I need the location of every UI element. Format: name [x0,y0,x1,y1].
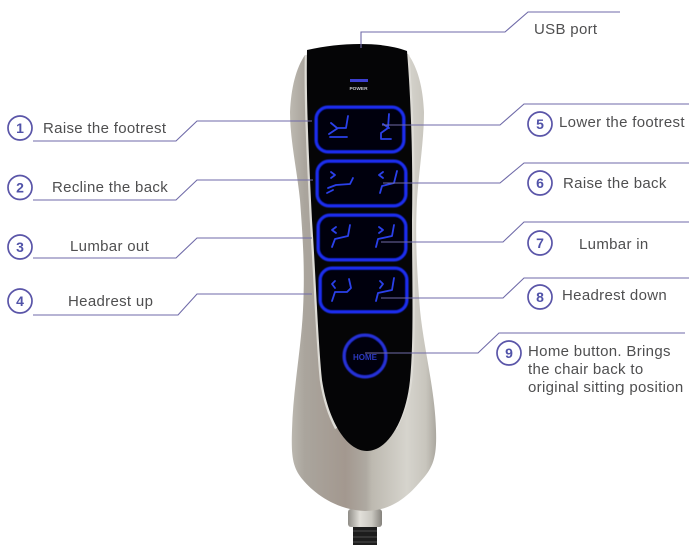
remote control [290,44,436,545]
callout 4: 4 [16,293,24,309]
metal collar [348,509,382,527]
button pair 1 [316,107,404,152]
callout 9: the chair back to [528,361,644,378]
silver body [290,54,436,511]
power indicator [349,79,368,92]
highlight along panel edge [307,55,412,428]
callout 3: 3 [16,239,24,255]
callout 9: Home button. Brings [528,343,671,360]
power indicator: POWER [349,86,368,92]
callout 5: Lower the footrest [559,114,685,131]
callout 1: Raise the footrest [43,120,167,137]
callout 7 [528,231,649,255]
callout 2 [8,176,168,200]
callout 1 [8,116,167,140]
label: USB port: USB port [534,21,598,38]
callout 2: Recline the back [52,179,168,196]
button pair 2 [317,161,406,206]
cable [353,524,377,545]
callout 3 [8,235,150,259]
black face panel [307,44,412,451]
callout 1: 1 [16,120,24,136]
callout 8 [528,285,667,309]
callout 6 [528,171,667,195]
button pair 4 [320,268,407,312]
callout 5 [528,112,685,136]
callout 9: 9 [505,345,513,361]
callout 4: Headrest up [68,293,153,310]
callout 5: 5 [536,116,544,132]
callout 2: 2 [16,180,24,196]
callout 6: 6 [536,175,544,191]
callout 9 [497,341,684,396]
callout 3: Lumbar out [70,238,150,255]
button pair 3 [318,215,406,260]
leader lines [33,12,689,353]
home button [344,335,386,377]
callout 7: 7 [536,235,544,251]
callout 8: 8 [536,289,544,305]
callout 6: Raise the back [563,175,667,192]
callout 9: original sitting position [528,379,684,396]
callout 4 [8,289,153,313]
home button: HOME [353,353,378,362]
callout 7: Lumbar in [579,236,649,253]
callout 8: Headrest down [562,287,667,304]
